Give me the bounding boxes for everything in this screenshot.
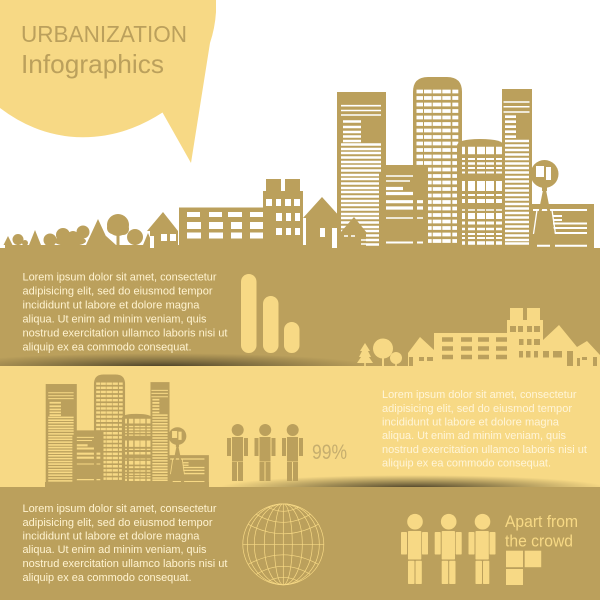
bar chart [241,274,300,353]
title: Infographics [21,49,164,79]
village silhouette [357,308,600,367]
mini city skyline [45,374,209,488]
stat: 99%: 99% [312,441,347,464]
small house windows [344,236,366,244]
text block one: Lorem ipsum dolor sit amet, consectetur [22,272,217,284]
text block three: aliquip ex ea commodo consequat. [22,572,192,584]
caption: apart from the crowd [505,513,578,550]
text block one: nostrud exercitation ullamco laboris nisi ut [22,328,228,340]
caption: apart from the crowd: Apart from [505,513,578,531]
text block two [382,389,588,470]
text block three: nostrud exercitation ullamco laboris nisi ut [22,558,228,570]
band: gold section three [0,487,600,600]
text block one: aliqua. Ut enim ad minim veniam, quis [22,314,207,326]
text block one: incididunt ut labore et dolore magna [22,300,200,312]
house windows [320,228,337,248]
band: gold section one [0,248,600,366]
trees [4,214,594,248]
text block one: adipisicing elit, sed do eiusmod tempor [22,286,213,298]
icon: wireframe globe [243,504,324,585]
title [21,21,187,79]
village windows [442,340,507,357]
people group: three light figures [401,514,496,584]
text block two: aliquip ex ea commodo consequat. [382,458,551,470]
apartment block [179,208,264,248]
text block one: aliquip ex ea commodo consequat. [22,342,192,354]
background: white top area [0,0,600,248]
text block two: nostrud exercitation ullamco laboris nisi ut [382,444,588,456]
house [147,212,178,248]
shadow two [230,476,596,487]
text block three: adipisicing elit, sed do eiusmod tempor [22,517,213,529]
text block two: incididunt ut labore et dolore magna [382,416,560,428]
band: yellow section two [0,366,600,487]
title: URBANIZATION [21,21,187,47]
caption: apart from the crowd: the crowd [505,532,573,550]
speech bubble [0,0,216,163]
text block one [22,272,228,354]
downtown buildings [337,77,594,248]
apartment tower [263,179,303,248]
village houses [408,308,600,366]
shadow one [0,354,354,366]
text block three: aliqua. Ut enim ad minim veniam, quis [22,544,207,556]
house by the towers [303,197,341,248]
village tower windows [409,326,597,366]
text block two: aliqua. Ut enim ad minim veniam, quis [382,430,566,442]
text block three [22,503,228,584]
text block three: Lorem ipsum dolor sit amet, consectetur [22,503,217,515]
village trees [357,338,402,367]
small house [340,217,367,248]
skyline: top city and village [4,77,594,248]
icon: three squares [506,551,541,585]
text block two: Lorem ipsum dolor sit amet, consectetur [382,389,577,401]
text block two: adipisicing elit, sed do eiusmod tempor [382,403,572,415]
text block three: incididunt ut labore et dolore magna [22,530,200,542]
people group: three figures [227,424,303,481]
